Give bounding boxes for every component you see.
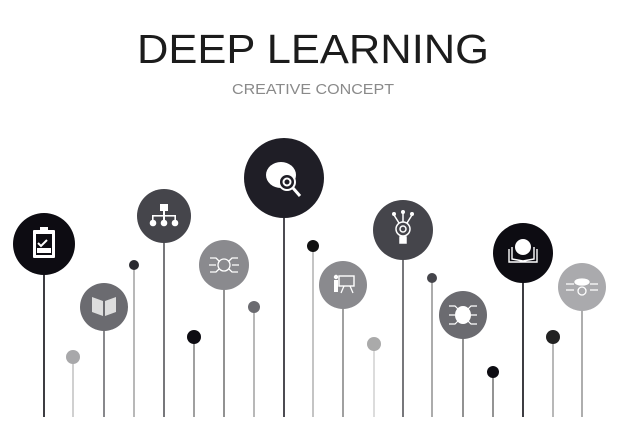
pin 1: clipboard (13, 213, 75, 417)
pin 5: brain search (244, 138, 324, 417)
dot 6 (367, 337, 381, 417)
subtitle: CREATIVE CONCEPT (232, 81, 394, 98)
dot 8 (487, 366, 499, 417)
icon: open book brain (509, 239, 537, 262)
pin 6: presentation (319, 261, 367, 417)
title: DEEP LEARNING (137, 26, 489, 72)
icon: clipboard (33, 227, 55, 258)
icon: hierarchy (150, 204, 178, 226)
icon: presenter (334, 275, 354, 293)
dot 9 (546, 330, 560, 417)
dot 2 (129, 260, 139, 417)
icon: database gear (566, 279, 598, 295)
pin 9: book brain (493, 223, 553, 417)
pin 8: brain bug (439, 291, 487, 417)
icon: bulb gear (394, 213, 412, 243)
icon: book brain (92, 297, 116, 316)
pin 7: bulb gear (373, 200, 433, 417)
pin 10: database (558, 263, 606, 417)
icon: brain magnifier (266, 162, 300, 196)
dot 7 (427, 273, 437, 417)
dot 5 (307, 240, 319, 417)
pin 4: network (199, 240, 249, 417)
icon: network (209, 258, 239, 272)
pin 2: book (80, 283, 128, 417)
dot 4 (248, 301, 260, 417)
dot 3 (187, 330, 201, 417)
dot 1 (66, 350, 80, 417)
pin 3: hierarchy (137, 189, 191, 417)
icon: brain chip (449, 306, 477, 324)
